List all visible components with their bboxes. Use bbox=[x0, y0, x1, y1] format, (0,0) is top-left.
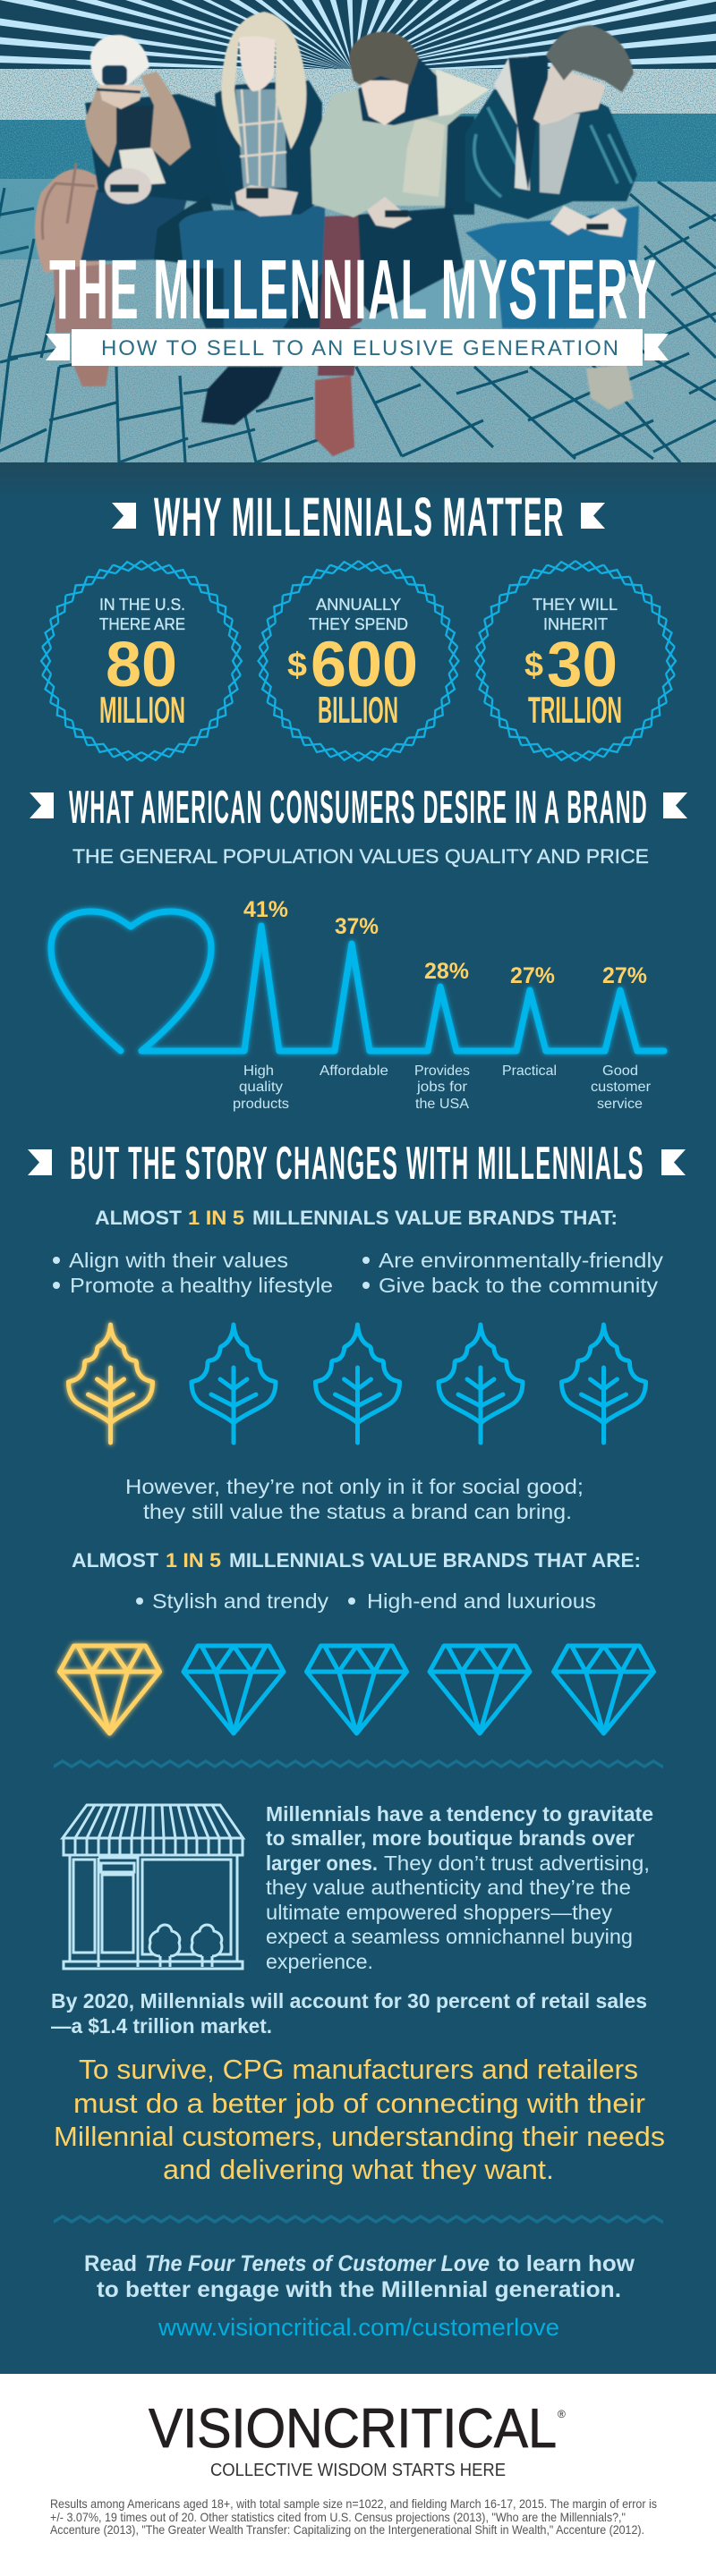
text: call to action: The Four Tenets of Customer Love bbox=[145, 2251, 490, 2276]
panel: white footer bbox=[0, 2374, 716, 2576]
person 3 bbox=[310, 30, 502, 456]
background wall and pavement bbox=[0, 69, 716, 463]
list: social values: Align with their values bbox=[69, 1249, 288, 1272]
sunburst rays bbox=[0, 0, 716, 69]
subheading: 1 in 5 value brands that are: ALMOST bbox=[72, 1549, 159, 1572]
link: url: www.visioncritical.com/customerlove bbox=[158, 2314, 559, 2341]
list: status values bbox=[136, 1589, 596, 1613]
percentages: 27% bbox=[510, 963, 555, 988]
person 4 bbox=[465, 25, 639, 410]
tagline: COLLECTIVE WISDOM STARTS HERE bbox=[210, 2461, 506, 2480]
stat circle: 600 billion: 600 bbox=[311, 630, 418, 700]
icon: storefront bbox=[63, 1805, 243, 1969]
subtitle ribbon: HOW TO SELL TO AN ELUSIVE GENERATION bbox=[101, 336, 618, 360]
stat circle: 600 billion: THEY SPEND bbox=[309, 614, 408, 633]
subheading: general population: THE GENERAL POPULATION VALUES QUALITY AND PRICE bbox=[72, 845, 649, 868]
stat circle: 30 trillion: INHERIT bbox=[543, 614, 608, 633]
subheading: 1 in 5 value brands that are: 1 IN 5 bbox=[166, 1549, 221, 1572]
logo: vision critical: ® bbox=[558, 2408, 566, 2420]
text: however status: they still value the status a brand can bring. bbox=[143, 1500, 572, 1523]
icons: five diamonds, one highlighted bbox=[59, 1646, 653, 1733]
stat circle: 30 trillion bbox=[473, 557, 678, 765]
text: boutique brands paragraph: experience. bbox=[266, 1950, 373, 1973]
text: boutique brands paragraph: ultimate empowered shoppers—they bbox=[266, 1901, 613, 1924]
percentages: 28% bbox=[424, 959, 469, 984]
text: 2020 retail sales: By 2020, Millennials will account for 30 percent of retail sales bbox=[51, 1989, 647, 2012]
peak labels: the USA bbox=[415, 1097, 469, 1112]
text: boutique brands paragraph: larger ones. bbox=[266, 1852, 378, 1875]
peak labels: Practical bbox=[502, 1063, 557, 1079]
peak labels: customer bbox=[591, 1080, 652, 1095]
percentages bbox=[243, 897, 647, 988]
stat circle: 30 trillion: $ bbox=[524, 647, 543, 684]
text: 2020 retail sales: —a $1.4 trillion market. bbox=[51, 2014, 272, 2038]
peak labels: Good bbox=[602, 1063, 638, 1079]
subheading: 1 in 5 value brands that: ALMOST bbox=[95, 1207, 183, 1229]
peak labels: Provides bbox=[414, 1063, 470, 1079]
logo: vision critical: VISIONCRITICAL bbox=[149, 2398, 557, 2460]
icon: heart and pulse line bbox=[51, 911, 664, 1051]
peak labels: products bbox=[233, 1097, 289, 1112]
stat circle: 80 million: IN THE U.S. bbox=[99, 595, 185, 614]
text: boutique brands paragraph: to smaller, more boutique brands over bbox=[266, 1826, 635, 1850]
stat circle: 30 trillion: TRILLION bbox=[528, 689, 622, 731]
stat circle: 80 million: 80 bbox=[106, 630, 177, 700]
stat circle: 600 billion bbox=[255, 557, 462, 765]
footnote bbox=[50, 2496, 657, 2537]
subheading: 1 in 5 value brands that are: MILLENNIALS VALUE BRANDS THAT ARE: bbox=[229, 1549, 641, 1572]
text: boutique brands paragraph: they value authenticity and they’re the bbox=[266, 1876, 631, 1899]
four people with phones bbox=[35, 12, 639, 456]
percentages: 41% bbox=[243, 897, 288, 922]
stat circle: 80 million: THERE ARE bbox=[99, 614, 185, 633]
stat circle: 600 billion: $ bbox=[287, 647, 307, 684]
peak labels: service bbox=[597, 1097, 643, 1112]
text: 2020 retail sales bbox=[51, 1989, 647, 2038]
peak labels bbox=[233, 1063, 652, 1112]
text: boutique brands paragraph bbox=[266, 1802, 653, 1973]
panel: section top fade bbox=[0, 462, 716, 498]
callout: yellow conclusion bbox=[54, 2054, 665, 2185]
text: boutique brands paragraph: Millennials have a tendency to gravitate bbox=[266, 1802, 653, 1826]
peak labels: jobs for bbox=[416, 1080, 468, 1095]
footnote: Results among Americans aged 18+, with total sample size n=1022, and fielding March 16-17, 2015. The margin of error is bbox=[50, 2496, 657, 2511]
person 2 bbox=[179, 12, 325, 425]
footnote: Accenture (2013), "The Greater Wealth Transfer: Capitalizing on the Intergenerational Shift in Wealth," Accenture (2012). bbox=[50, 2522, 644, 2537]
text: boutique brands paragraph: expect a seamless omnichannel buying bbox=[266, 1925, 633, 1948]
text: however status bbox=[125, 1475, 584, 1523]
callout: yellow conclusion: and delivering what they want. bbox=[163, 2154, 554, 2185]
panel: hero photo illustration bbox=[0, 0, 716, 463]
list: status values: High-end and luxurious bbox=[367, 1589, 596, 1613]
subtitle ribbon bbox=[46, 329, 669, 366]
footnote: +/- 3.07%, 19 times out of 20. Other statistics cited from U.S. Census projections (2013), "Who are the Millennials?," bbox=[50, 2510, 626, 2524]
text: however status: However, they’re not only in it for social good; bbox=[125, 1475, 584, 1498]
stat circle: 600 billion: ANNUALLY bbox=[316, 595, 401, 614]
stat circle: 80 million bbox=[38, 557, 244, 765]
text: boutique brands paragraph: They don’t trust advertising, bbox=[384, 1852, 650, 1875]
subheading: 1 in 5 value brands that bbox=[95, 1207, 618, 1229]
peak labels: quality bbox=[239, 1080, 283, 1095]
person 1 bbox=[35, 35, 231, 386]
icons: five leaves, one highlighted bbox=[68, 1325, 646, 1443]
text: call to action bbox=[84, 2251, 635, 2302]
percentages: 27% bbox=[602, 963, 647, 988]
dark mass behind people bbox=[179, 116, 474, 328]
callout: yellow conclusion: Millennial customers, understanding their needs bbox=[54, 2121, 665, 2152]
callout: yellow conclusion: To survive, CPG manufacturers and retailers bbox=[79, 2054, 638, 2085]
list: status values: Stylish and trendy bbox=[152, 1589, 329, 1613]
callout: yellow conclusion: must do a better job of connecting with their bbox=[73, 2088, 645, 2119]
list: social values: Are environmentally-friendly bbox=[379, 1249, 664, 1272]
subheading: 1 in 5 value brands that: 1 IN 5 bbox=[188, 1207, 244, 1229]
stat circle: 600 billion: BILLION bbox=[318, 689, 398, 731]
stat circle: 30 trillion: THEY WILL bbox=[533, 595, 618, 614]
chart: heartbeat line with percentages bbox=[51, 897, 664, 1112]
list: social values: Give back to the community bbox=[379, 1274, 659, 1297]
list: social values bbox=[53, 1249, 664, 1297]
text: call to action: to learn how bbox=[498, 2251, 635, 2276]
stat circle: 30 trillion: 30 bbox=[547, 630, 618, 700]
subheading: 1 in 5 value brands that: MILLENNIALS VALUE BRANDS THAT: bbox=[252, 1207, 618, 1229]
peak labels: Affordable bbox=[320, 1063, 388, 1079]
text: call to action: Read bbox=[84, 2251, 137, 2276]
peak labels: High bbox=[243, 1063, 274, 1079]
list: social values: Promote a healthy lifestyle bbox=[70, 1274, 333, 1297]
percentages: 37% bbox=[335, 914, 379, 939]
text: call to action: to better engage with the Millennial generation. bbox=[97, 2277, 621, 2302]
stat circle: 80 million: MILLION bbox=[99, 689, 185, 731]
handbag bbox=[154, 195, 215, 264]
